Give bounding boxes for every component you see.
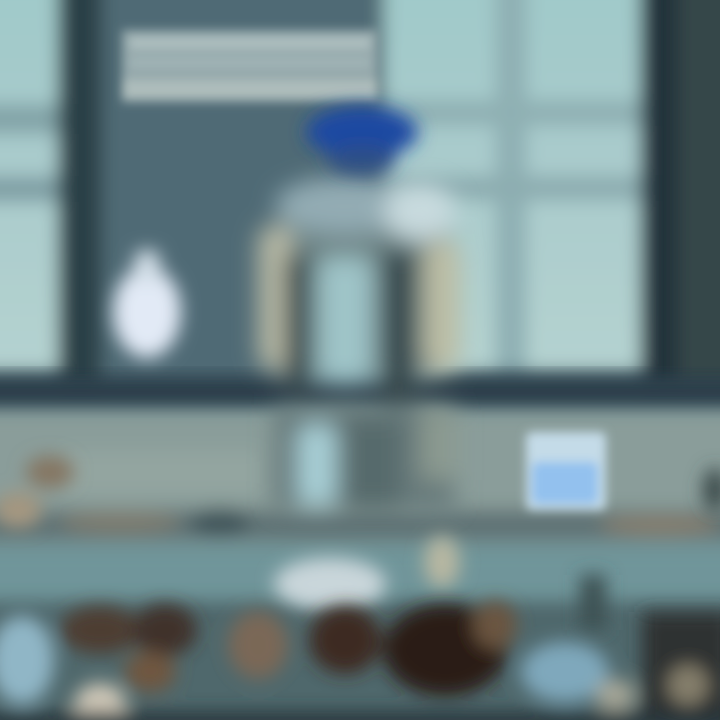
icon: small white bottle — [113, 250, 181, 358]
bottle cap — [306, 106, 418, 174]
window sill band — [0, 376, 720, 408]
foreground pebbles and bottle base — [0, 456, 720, 630]
icon: glass of water — [526, 432, 606, 510]
counter surface — [0, 412, 720, 720]
background wall and windows — [0, 0, 720, 410]
heading block, illegible in the reference — [122, 30, 378, 102]
bottle body — [258, 177, 460, 510]
foreground rocks and dark objects — [0, 601, 720, 720]
icon: large water bottle — [258, 106, 460, 510]
